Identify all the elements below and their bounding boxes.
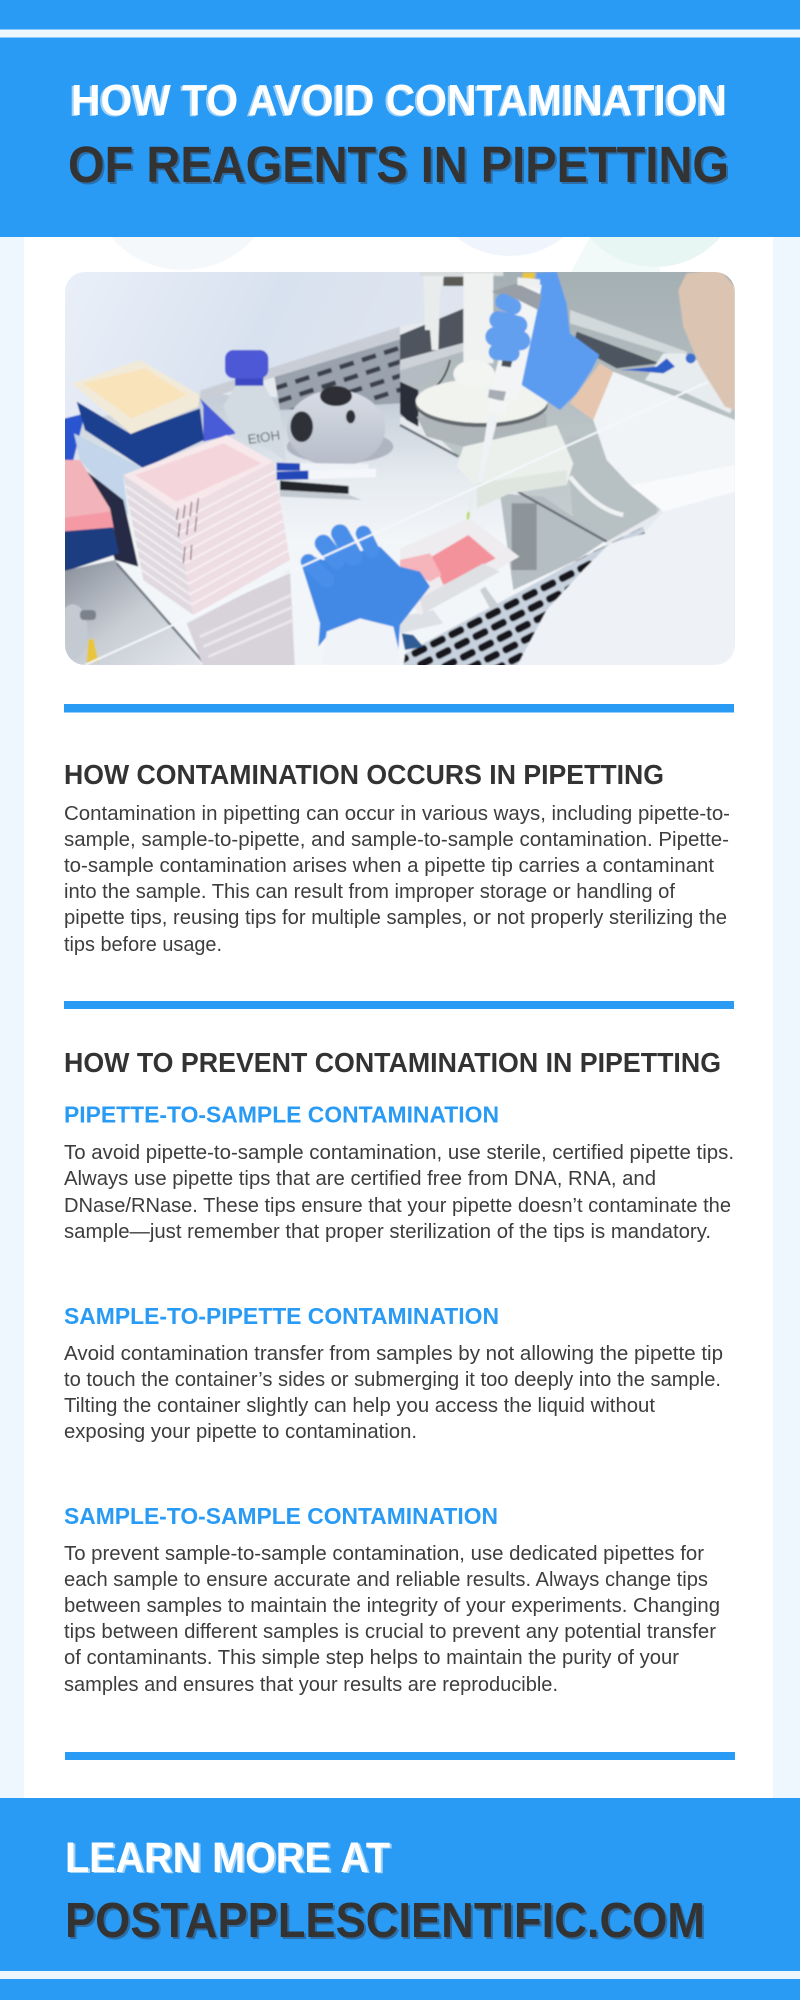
- paragraph: Contamination in pipetting can occur in various ways, including pipette-to-: [64, 803, 730, 825]
- lab coat sleeve: [593, 372, 735, 485]
- bench surface across the photo: [60, 393, 607, 670]
- paragraph: into the sample. This can result from improper storage or handling of: [64, 881, 675, 903]
- stack of well plates: [123, 435, 290, 615]
- paragraph: sample—just remember that proper sterilization of the tips is mandatory.: [64, 1221, 711, 1243]
- paragraph: tips before usage.: [64, 934, 222, 956]
- tube at lower left: [65, 604, 99, 664]
- paragraph: [64, 1543, 720, 1696]
- reflection stripes: [200, 595, 293, 657]
- bench edges: [400, 425, 607, 542]
- faint background circles: [88, 80, 742, 272]
- title line 2: OF REAGENTS IN PIPETTING: [68, 136, 729, 193]
- footer line 2: POSTAPPLESCIENTIFIC.COM: [65, 1894, 705, 1948]
- subheading: SAMPLE-TO-SAMPLE CONTAMINATION: [64, 1503, 498, 1529]
- title line 1: HOW TO AVOID CONTAMINATION: [71, 76, 727, 125]
- paragraph: [64, 1142, 734, 1243]
- subheading: PIPETTE-TO-SAMPLE CONTAMINATION: [64, 1102, 499, 1128]
- gripping fingers: [495, 302, 521, 353]
- lower gloved hand: [302, 533, 430, 650]
- paragraph: exposing your pipette to contamination.: [64, 1421, 417, 1443]
- paragraph: tips between different samples is crucial to prevent any potential transfer: [64, 1621, 716, 1643]
- subsection: sample-to-sample: [64, 1503, 720, 1696]
- paragraph: pipette tips, reusing tips for multiple samples, or not properly sterilizing the: [64, 907, 727, 929]
- wrist: [570, 363, 613, 420]
- paragraph: To avoid pipette-to-sample contamination, use sterile, certified pipette tips.: [64, 1142, 734, 1164]
- paragraph: samples and ensures that your results are reproducible.: [64, 1674, 558, 1696]
- photo: gloved hands pipetting in a lab hood: [58, 270, 740, 670]
- second pipette on stand: [423, 272, 445, 350]
- subsection: sample-to-pipette: [64, 1303, 723, 1443]
- EtOH bottle: [223, 350, 286, 462]
- left half of photo: [58, 327, 430, 670]
- section: how to prevent contamination: [64, 1047, 734, 1696]
- mirrored column: [500, 493, 607, 590]
- paragraph: between samples to maintain the integrity of your experiments. Changing: [64, 1595, 720, 1617]
- paragraph: [64, 1343, 723, 1443]
- divider bar 1: [64, 704, 734, 712]
- paragraph: to touch the container’s sides or submerging it too deeply into the sample.: [64, 1369, 721, 1391]
- cables: [400, 382, 418, 427]
- paragraph: To prevent sample-to-sample contamination, use dedicated pipettes for: [64, 1543, 704, 1565]
- bottle label: EtOH: [247, 428, 281, 447]
- bottom band: [0, 1979, 800, 2000]
- vortex mixer: [287, 386, 393, 467]
- vent grille: [403, 527, 645, 667]
- markers: [277, 463, 376, 500]
- pink tip box: [60, 460, 119, 573]
- shadow under tray: [85, 470, 138, 567]
- lower sleeve: [322, 618, 400, 670]
- white content panel: [24, 230, 773, 1800]
- divider bar 3: [65, 1752, 735, 1760]
- heading: HOW CONTAMINATION OCCURS IN PIPETTING: [64, 759, 664, 790]
- divider bar 2: [64, 1001, 734, 1009]
- lab coat body: [517, 492, 735, 667]
- paragraph: to-sample contamination arises when a pipette tip carries a contaminant: [64, 855, 714, 877]
- arm pipette and bench items: [645, 353, 735, 413]
- subsection: pipette-to-sample: [64, 1102, 734, 1243]
- cuff: [630, 465, 735, 512]
- footer line 1: LEARN MORE AT: [65, 1835, 390, 1882]
- paragraph: Tilting the container slightly can help you access the liquid without: [64, 1395, 655, 1417]
- top band: [0, 0, 800, 30]
- pink well plate: [400, 518, 519, 615]
- footer panel: [0, 1798, 800, 1971]
- subheading: SAMPLE-TO-PIPETTE CONTAMINATION: [64, 1303, 499, 1329]
- tray: [74, 433, 143, 515]
- small empty plate: [400, 610, 443, 633]
- header panel: [0, 38, 800, 237]
- paragraph: of contaminants. This simple step helps to maintain the purity of your: [64, 1647, 679, 1669]
- paragraph: each sample to ensure accurate and reliable results. Always change tips: [64, 1569, 708, 1591]
- perforated rail: [273, 338, 400, 410]
- paragraph: Avoid contamination transfer from samples by not allowing the pipette tip: [64, 1343, 723, 1365]
- wall across the back: [65, 272, 444, 393]
- glass edge: [85, 382, 708, 665]
- pipette: [466, 273, 542, 524]
- heading: HOW TO PREVENT CONTAMINATION IN PIPETTING: [64, 1047, 721, 1078]
- dark rail piece: [400, 307, 468, 360]
- lower left floor: [60, 560, 207, 670]
- right half of photo: [400, 270, 735, 667]
- paragraph: DNase/RNase. These tips ensure that your pipette doesn’t contaminate the: [64, 1195, 731, 1217]
- glass and hood interior: [400, 270, 735, 542]
- section: how contamination occurs: [64, 759, 730, 956]
- face and mask: [678, 270, 735, 410]
- stand leg: [480, 587, 498, 608]
- paragraph: sample, sample-to-pipette, and sample-to-sample contamination. Pipette-: [64, 829, 729, 851]
- pipette stand: [416, 270, 548, 447]
- upper glove palm: [522, 272, 599, 410]
- paragraph: [64, 803, 730, 956]
- paragraph: Always use pipette tips that are certified free from DNA, RNA, and: [64, 1168, 656, 1190]
- blue racks: [200, 398, 237, 442]
- liquid trough: [457, 425, 573, 508]
- tip box: [72, 360, 204, 468]
